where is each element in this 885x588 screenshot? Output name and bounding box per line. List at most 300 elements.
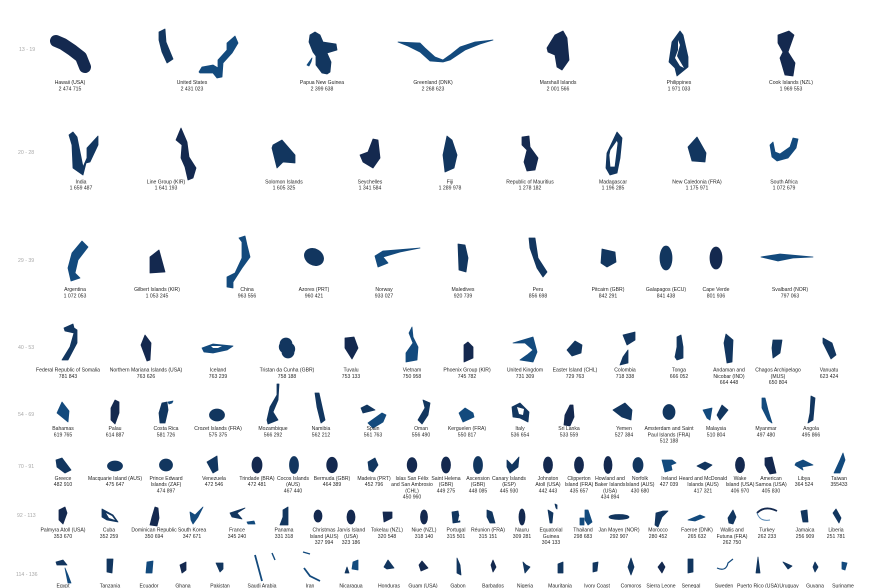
country: Yemen: Yemen (616, 426, 632, 432)
country: Morocco (648, 511, 668, 540)
row: 54 - 69 (18, 384, 820, 445)
country: Chagos Archipelago (755, 340, 801, 386)
country: Iran (303, 552, 320, 588)
country: Turkey: 262 233 (758, 534, 776, 540)
country: Pitcairn: 842 291 (599, 293, 617, 299)
country: South Korea (178, 507, 206, 540)
country: Heard and McDonald Islands: Heard and McDonald (679, 476, 727, 482)
country: Heard and McDonald Islands: 417 321 (694, 488, 712, 494)
country: Ireland (660, 460, 678, 488)
country: United States: 2 431 023 (181, 86, 203, 92)
country: Fiji (439, 136, 461, 192)
country: Galapagos: Galapagos (ECU) (646, 287, 686, 293)
country: Johnston Atoll: Atoll (USA) (535, 482, 561, 488)
country: Palmyra Atoll: 353 670 (54, 534, 72, 540)
country: Dominican Republic: 350 694 (145, 534, 163, 540)
country: Clipperton Island: Island (FRA) (565, 482, 594, 488)
country: India: India (75, 180, 87, 186)
country: Palau (106, 400, 124, 438)
country: South Korea: South Korea (178, 528, 206, 534)
country: Greece: Greece (55, 476, 71, 482)
country: Wallis and Futuna: 262 750 (723, 540, 741, 546)
country: Saint Helena: 449 275 (437, 488, 455, 494)
country: Crozet Islands: Crozet Islands (FRA) (194, 426, 242, 432)
country: Republic of Mauritius: 1 278 182 (519, 186, 541, 192)
country: Libya: Libya (798, 476, 810, 482)
country: Tokelau (371, 512, 403, 540)
country: Nauru: 309 281 (513, 534, 531, 540)
country: Oman: 556 490 (412, 432, 430, 438)
country: Réunion: Réunion (FRA) (471, 528, 505, 534)
country: Solomon Islands: 1 605 325 (273, 186, 295, 192)
country: Cocos Islands: Cocos Islands (277, 476, 309, 482)
country: Greece: 482 910 (54, 482, 72, 488)
country: American Samoa: American (760, 476, 782, 482)
country: France: 345 240 (228, 534, 246, 540)
country: France (228, 508, 255, 540)
country: Tristan da Cunha (260, 338, 315, 380)
country: Peru: 856 698 (529, 293, 547, 299)
country: Azores: Azores (PRT) (299, 287, 329, 293)
country: Azores: 960 421 (305, 293, 323, 299)
country: Iceland: Iceland (210, 368, 226, 374)
country: Tonga: 666 052 (670, 374, 688, 380)
country: Oman: Oman (414, 426, 428, 432)
country: Sri Lanka (558, 405, 580, 438)
country: Northern Mariana Islands: Northern Mariana Islands (USA) (110, 368, 182, 374)
country: Ascension: (GBR) (471, 482, 486, 488)
row: 13 - 19 (19, 29, 813, 92)
country: Equatorial Guinea (540, 504, 562, 546)
country: Cape Verde (703, 247, 730, 299)
country: Vanuatu (820, 338, 838, 380)
country: Madeira (357, 458, 391, 488)
country: Argentina: Argentina (64, 287, 86, 293)
country: New Caledonia (672, 137, 722, 192)
country: Philippines: Philippines (667, 80, 691, 86)
country: Niue: Niue (NZL) (412, 528, 436, 534)
country: Christmas Island: 327 994 (315, 540, 333, 546)
country: Prince Edward Islands: Islands (ZAF) (151, 482, 182, 488)
country: Réunion (471, 510, 505, 540)
country: Libya (795, 460, 813, 488)
country: Ivory Coast (584, 562, 610, 588)
country: Sri Lanka: 533 559 (560, 432, 578, 438)
country: Svalbard: 797 063 (781, 293, 799, 299)
country: China (227, 236, 256, 299)
country: Mozambique: 566 292 (264, 432, 282, 438)
country: Saudi Arabia (248, 553, 277, 588)
country: Portugal: Portugal (447, 528, 465, 534)
country: Cuba (100, 509, 118, 540)
country: Saint Helena (431, 457, 461, 494)
country: Andaman and Nicobar: 664 448 (720, 380, 738, 386)
country: Trindade: Trindade (BRA) (239, 476, 275, 482)
country: Bahamas: 619 765 (54, 432, 72, 438)
country: Madagascar (599, 132, 627, 192)
country: Italy: Italy (515, 426, 525, 432)
country: Ghana (175, 562, 191, 588)
country: Saint Helena: (GBR) (439, 482, 454, 488)
country: Northern Mariana Islands (110, 335, 183, 380)
country: Easter Island: Easter Island (CHL) (553, 368, 597, 374)
country: Norfolk Island: 430 680 (631, 488, 649, 494)
country: Greenland (398, 40, 493, 92)
country: Andaman and Nicobar (713, 334, 745, 386)
country: Vietnam: 750 958 (403, 374, 421, 380)
country: South Africa: South Africa (770, 180, 798, 186)
country: Tanzania (100, 559, 120, 588)
country: Taiwan: 355433 (830, 482, 848, 488)
country: Uruguay (779, 562, 799, 588)
country: Yemen: 527 384 (615, 432, 633, 438)
country: Seychelles: 1 341 584 (359, 186, 381, 192)
country: Palmyra Atoll (40, 507, 86, 540)
range label: 92 - 113 (17, 513, 36, 519)
country: Liberia: Liberia (828, 528, 844, 534)
country: United Kingdom (507, 337, 543, 380)
country: American Samoa: 405 830 (762, 488, 780, 494)
country: France: France (229, 528, 245, 534)
country: Malaysia (703, 405, 728, 438)
country: Prince Edward Islands: Prince Edward (149, 476, 183, 482)
country: Sierra Leone (646, 562, 676, 588)
country: Suriname (832, 562, 854, 588)
country: Saint Helena: Saint Helena (431, 476, 461, 482)
country: Namibia (312, 393, 331, 438)
country: Chagos Archipelago: 650 804 (769, 380, 787, 386)
country: Seychelles: Seychelles (358, 180, 382, 186)
country: Tuvalu: Tuvalu (343, 368, 359, 374)
country: Prince Edward Islands (149, 459, 183, 494)
row: 114 - 136 (16, 552, 854, 588)
country: Madeira: 452 796 (365, 482, 383, 488)
country: Yemen (613, 403, 633, 438)
range label: 70 - 91 (18, 464, 34, 470)
country: Chagos Archipelago: Chagos Archipelago (755, 368, 801, 374)
country: Egypt (56, 560, 71, 588)
country: Norway: Norway (375, 287, 393, 293)
country: Howland and Baker Islands: (USA) (603, 488, 617, 494)
country: Easter Island (553, 341, 598, 380)
country: Vietnam (403, 327, 421, 380)
country: Comoros (621, 558, 642, 588)
country: Niue: 318 140 (415, 534, 433, 540)
country: Maledives: Maledives (452, 287, 474, 293)
country: Bermuda (314, 457, 351, 488)
country: Ascension: 448 085 (469, 488, 487, 494)
country: Phoenix Group (443, 342, 491, 380)
country: Cook Islands: 1 969 553 (780, 86, 802, 92)
country: Spain (361, 405, 386, 438)
country: Liberia: 251 781 (827, 534, 845, 540)
country: Kerguelen (448, 408, 486, 438)
country: Ascension: Ascension (466, 476, 490, 482)
country: Wake Island: 406 970 (731, 488, 749, 494)
country: Vanuatu: Vanuatu (820, 368, 838, 374)
country: Gabon (450, 558, 466, 588)
country: Clipperton Island: 435 657 (570, 488, 588, 494)
country: Spain: 561 763 (364, 432, 382, 438)
country: Malaysia: 510 804 (707, 432, 725, 438)
row: 40 - 53 (18, 324, 838, 386)
country: Mozambique (258, 384, 288, 438)
country: Senegal (682, 559, 700, 588)
country: Vietnam: Vietnam (403, 368, 421, 374)
range label: 29 - 39 (18, 258, 34, 264)
country: Cape Verde: Cape Verde (703, 287, 729, 293)
country: Guyana (806, 562, 824, 588)
country: Wake Island: Island (USA) (726, 482, 755, 488)
country: Hawaii: 2 474 715 (59, 86, 81, 92)
country: Italy: 536 654 (511, 432, 529, 438)
country: Bahamas: Bahamas (52, 426, 74, 432)
country: Christmas Island: Christmas (313, 528, 335, 534)
country: Gilbert Islands (134, 250, 180, 299)
country: Norfolk Island: Island (AUS) (626, 482, 655, 488)
country: Myanmar (755, 398, 777, 438)
country: Colombia: 718 338 (616, 374, 634, 380)
country: Andaman and Nicobar: Nicobar (IND) (713, 374, 745, 380)
row: 29 - 39 (18, 236, 813, 299)
country: Philippines (667, 31, 692, 92)
country: Prince Edward Islands: 474 897 (157, 488, 175, 494)
country: Jamaica: Jamaica (796, 528, 814, 534)
country: Solomon Islands: Solomon Islands (265, 180, 303, 186)
country: Madagascar: Madagascar (599, 180, 627, 186)
country: Svalbard: Svalbard (NOR) (772, 287, 808, 293)
country: Cocos Islands: (AUS) (286, 482, 300, 488)
country: Libya: 364 524 (795, 482, 813, 488)
country: Mozambique: Mozambique (258, 426, 288, 432)
country: Gilbert Islands: 1 053 245 (146, 293, 168, 299)
country: Jarvis Island: (USA) (344, 534, 358, 540)
country: Jarvis Island: Jarvis Island (337, 528, 365, 534)
country: Costa Rica: 581 726 (157, 432, 175, 438)
country: Thailand: 298 683 (574, 534, 592, 540)
country: Niue (412, 510, 437, 540)
country: Greece (54, 458, 72, 488)
country: South Korea: 347 671 (183, 534, 201, 540)
country: Marshall Islands (540, 31, 577, 92)
country: Kerguelen: 550 817 (458, 432, 476, 438)
country: Tokelau: 320 548 (378, 534, 396, 540)
country: Puerto Rico (737, 557, 779, 588)
country: Hawaii: Hawaii (USA) (55, 80, 85, 86)
country: Ecuador (140, 561, 159, 588)
country: Tuvalu (342, 337, 360, 380)
country: Papua New Guinea (300, 32, 344, 92)
country: Galapagos: 841 438 (657, 293, 675, 299)
country: Cuba: 352 259 (100, 534, 118, 540)
country: Tristan da Cunha: 758 188 (278, 374, 296, 380)
country: Thailand (573, 510, 593, 540)
range label: 40 - 53 (18, 345, 34, 351)
country: Heard and McDonald Islands: Islands (AUS) (687, 482, 719, 488)
country: Phoenix Group: 745 782 (458, 374, 476, 380)
country: Bermuda: Bermuda (GBR) (314, 476, 350, 482)
country: Wake Island: Wake (734, 476, 746, 482)
country: Jamaica (796, 510, 815, 540)
country: Federal Republic of Somalia: Federal Republic of Somalia (36, 368, 100, 374)
country: Dominican Republic: Dominican Republic (131, 528, 177, 534)
country: Nicaragua (339, 560, 363, 588)
country: China: China (240, 287, 254, 293)
country: South Africa (770, 138, 798, 192)
country: Tonga (670, 335, 688, 380)
country: Turkey (757, 508, 777, 540)
country: Fiji: Fiji (447, 180, 453, 186)
country: Trindade (239, 457, 275, 488)
country: Philippines: 1 971 033 (668, 86, 690, 92)
country: Chagos Archipelago: (MUS) (771, 374, 786, 380)
country: Jarvis Island: 323 186 (342, 540, 360, 546)
country: Panama (275, 507, 294, 540)
country: South Africa: 1 072 679 (773, 186, 795, 192)
country: Iceland (202, 344, 233, 380)
country: Equatorial Guinea: 304 133 (542, 540, 560, 546)
country: Tonga: Tonga (672, 368, 686, 374)
country: Namibia: Namibia (312, 426, 330, 432)
country: United Kingdom: United Kingdom (507, 368, 543, 374)
country: Namibia: 562 212 (312, 432, 330, 438)
country: Republic of Mauritius (506, 136, 554, 192)
country: Greenland: 2 268 623 (422, 86, 444, 92)
country: Ascension (466, 456, 490, 494)
country: Islas San Felix and San Ambrosio (391, 458, 433, 501)
country: Solomon Islands (265, 140, 303, 192)
country: Morocco: 280 452 (649, 534, 667, 540)
country: Angola: 495 866 (802, 432, 820, 438)
country: Sweden (715, 559, 733, 588)
country: Liberia (827, 509, 845, 540)
country: Howland and Baker Islands: 434 894 (601, 495, 619, 501)
country: Amsterdam and Saint Paul Islands: Paul Islands (FRA) (648, 432, 691, 438)
country: Jarvis Island (337, 510, 365, 546)
country: Jamaica: 256 909 (796, 534, 814, 540)
country: Clipperton Island (565, 457, 594, 494)
country: Portugal (447, 511, 465, 540)
country: Faeroe: Faeroe (DNK) (681, 528, 713, 534)
country: Seychelles (358, 139, 383, 192)
country: India: 1 659 487 (70, 186, 92, 192)
country: Clipperton Island: Clipperton (567, 476, 591, 482)
country: Thailand: Thailand (573, 528, 593, 534)
country: Maledives: 920 739 (454, 293, 472, 299)
country: China: 963 556 (238, 293, 256, 299)
country: Fiji: 1 289 978 (439, 186, 461, 192)
country: Bahamas (52, 402, 74, 438)
row: 70 - 91 (18, 453, 848, 501)
country: Angola: Angola (803, 426, 819, 432)
country: Crozet Islands: 575 375 (209, 432, 227, 438)
country: Wallis and Futuna: Wallis and (720, 528, 744, 534)
country: Line Group (147, 128, 196, 192)
country: Azores (299, 245, 330, 299)
range label: 54 - 69 (18, 412, 34, 418)
country: Norway (375, 248, 420, 299)
country: Nauru (513, 509, 531, 540)
range label: 114 - 136 (16, 572, 38, 578)
country: Islas San Felix and San Ambrosio: (CHL) (405, 488, 419, 494)
country: Kerguelen: Kerguelen (FRA) (448, 426, 486, 432)
range label: 20 - 28 (18, 150, 34, 156)
country: United States: United States (177, 80, 207, 86)
country: Easter Island: 729 763 (566, 374, 584, 380)
country: India (69, 132, 98, 192)
country: Bermuda: 464 389 (323, 482, 341, 488)
country: Jan Mayen: 292 907 (610, 534, 628, 540)
country: Palau: Palau (108, 426, 122, 432)
country: Crozet Islands (194, 409, 242, 438)
country: Cocos Islands: 467 440 (284, 488, 302, 494)
country: New Caledonia: New Caledonia (FRA) (672, 180, 722, 186)
country: Papua New Guinea: 2 399 638 (311, 86, 333, 92)
country: Wallis and Futuna (717, 510, 748, 546)
country: Gilbert Islands: Gilbert Islands (KIR) (134, 287, 180, 293)
row: 20 - 28 (18, 128, 798, 192)
country: Equatorial Guinea: Guinea (543, 534, 559, 540)
country: Pitcairn (592, 249, 625, 299)
country: Islas San Felix and San Ambrosio: Islas San Félix (395, 476, 429, 482)
country: Wake Island (726, 457, 755, 494)
country: Cook Islands: Cook Islands (NZL) (769, 80, 813, 86)
country: Islas San Felix and San Ambrosio: 450 960 (403, 495, 421, 501)
country: Cape Verde: 801 936 (707, 293, 725, 299)
country: Johnston Atoll: Johnston (538, 476, 558, 482)
country: Spain: Spain (366, 426, 380, 432)
country: Line Group: 1 641 193 (155, 186, 177, 192)
country: Macquarie Island (88, 461, 142, 488)
country: Cuba: Cuba (103, 528, 115, 534)
country: Norfolk Island: Norfolk (632, 476, 648, 482)
country: Guam (408, 561, 438, 588)
country: Madeira: Madeira (PRT) (357, 476, 391, 482)
country: Vanuatu: 623 424 (820, 374, 838, 380)
country: Myanmar: 497 480 (757, 432, 775, 438)
country: Maledives (452, 244, 475, 299)
country: Faeroe: 265 632 (688, 534, 706, 540)
country: Tokelau: Tokelau (NZL) (371, 528, 403, 534)
country: American Samoa: Samoa (USA) (755, 482, 787, 488)
country: Nauru: Nauru (515, 528, 529, 534)
country: Palmyra Atoll: Palmyra Atoll (USA) (40, 528, 86, 534)
country: Peru: Peru (533, 287, 543, 293)
country: Costa Rica: Costa Rica (154, 426, 178, 432)
range label: 13 - 19 (19, 47, 35, 53)
country: Réunion: 315 151 (479, 534, 497, 540)
country: Costa Rica (154, 401, 179, 438)
country: Venezuela: Venezuela (202, 476, 226, 482)
country: Taiwan: Taiwan (831, 476, 847, 482)
country: Venezuela: 472 546 (205, 482, 223, 488)
country: Cocos Islands (277, 456, 309, 494)
country: United Kingdom: 731 309 (516, 374, 534, 380)
country: Andaman and Nicobar: Andaman and (713, 368, 745, 374)
country: Barbados (482, 560, 504, 588)
country: Christmas Island: Island (AUS) (310, 534, 339, 540)
country: Norfolk Island (626, 458, 655, 494)
country: Honduras (378, 560, 400, 588)
country: Palau: 614 887 (106, 432, 124, 438)
country: Norway: 933 027 (375, 293, 393, 299)
country: Amsterdam and Saint Paul Islands: Amsterdam and Saint (645, 426, 693, 432)
country: Iceland: 763 239 (209, 374, 227, 380)
country: Sri Lanka: Sri Lanka (558, 426, 580, 432)
country: Ireland: Ireland (661, 476, 677, 482)
country: Portugal: 315 501 (447, 534, 465, 540)
country: Canary Islands: 445 930 (500, 488, 518, 494)
